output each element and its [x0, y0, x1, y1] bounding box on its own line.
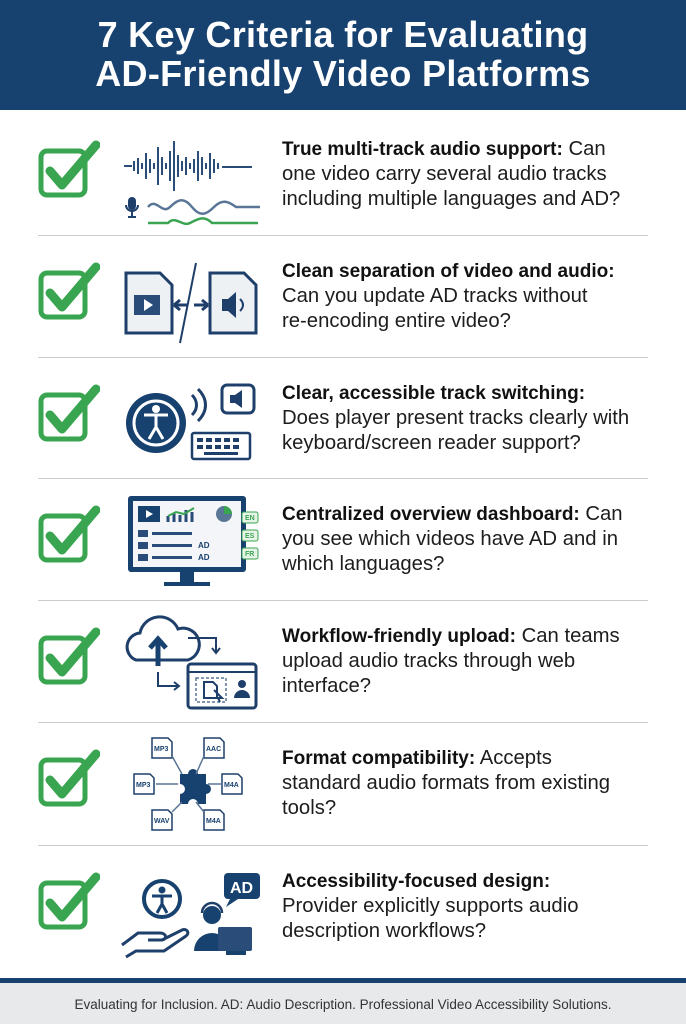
text [282, 383, 629, 454]
text: standard audio formats from existing [282, 772, 610, 794]
icon: checkbox [38, 140, 100, 198]
icon: cloud upload [126, 615, 258, 710]
icon: audio formats puzzle: AAC [206, 746, 221, 753]
text: keyboard/screen reader support? [282, 432, 581, 454]
icon: audio formats puzzle: MP3 [154, 746, 168, 753]
icon: dashboard monitor [128, 496, 258, 586]
text [282, 503, 623, 575]
icon: checkbox [38, 384, 100, 442]
text [282, 261, 615, 332]
icon: checkbox [38, 872, 100, 930]
text: Clean separation of video and audio: [282, 261, 615, 282]
text [282, 747, 610, 819]
footer [0, 978, 686, 1024]
icon: dashboard monitor: ES [245, 533, 255, 540]
text [282, 138, 620, 210]
icon: hand with accessibility and AD agent: AD [230, 880, 253, 897]
text: Can you update AD tracks without [282, 285, 588, 307]
text: Workflow-friendly upload: Can teams [282, 625, 620, 647]
icon: audio formats puzzle: M4A [206, 818, 221, 825]
icon: audio formats puzzle: MP3 [136, 782, 150, 789]
text: description workflows? [282, 920, 486, 942]
icon: audio waveform [124, 141, 260, 226]
icon: audio formats puzzle: M4A [224, 782, 239, 789]
icon: checkbox [38, 628, 100, 684]
icon: dashboard monitor: FR [245, 551, 254, 558]
icon: audio formats puzzle [133, 737, 243, 831]
title: 7 Key Criteria for Evaluating [98, 14, 588, 55]
text: Provider explicitly supports audio [282, 895, 578, 917]
row 1 [38, 138, 620, 226]
row 7 [38, 871, 578, 958]
icon: checkbox [38, 262, 100, 320]
text: tools? [282, 797, 336, 819]
icon: dashboard monitor: AD [198, 553, 210, 562]
row 5 [38, 615, 620, 710]
row 4 [38, 496, 623, 586]
text: re-encoding entire video? [282, 310, 511, 332]
icon: accessibility and keyboard [126, 384, 256, 460]
footer: Evaluating for Inclusion. AD: Audio Description. Professional Video Accessibility Solutions. [74, 997, 612, 1012]
text: including multiple languages and AD? [282, 188, 620, 210]
text: which languages? [282, 553, 444, 575]
icon: checkbox [38, 750, 100, 806]
icon: dashboard monitor: AD [198, 541, 210, 550]
text: Format compatibility: Accepts [282, 747, 552, 769]
text: upload audio tracks through web [282, 650, 575, 672]
text: one video carry several audio tracks [282, 163, 607, 185]
title [0, 0, 686, 110]
icon: hand with accessibility and AD agent [121, 873, 260, 958]
text [282, 871, 578, 942]
row 3 [38, 383, 629, 460]
icon: audio formats puzzle: WAV [154, 818, 170, 825]
text: Does player present tracks clearly with [282, 407, 629, 429]
icon: video and audio files [124, 262, 258, 344]
text: Accessibility-focused design: [282, 871, 550, 892]
row 6 [38, 737, 610, 831]
icon: checkbox [38, 506, 100, 562]
row 2 [38, 261, 615, 344]
text: Clear, accessible track switching: [282, 383, 585, 404]
icon: dashboard monitor: EN [245, 515, 255, 522]
text: you see which videos have AD and in [282, 528, 618, 550]
text: True multi-track audio support: Can [282, 138, 606, 160]
title: AD-Friendly Video Platforms [95, 53, 591, 94]
text: Centralized overview dashboard: Can [282, 503, 623, 525]
text [282, 625, 620, 697]
text: interface? [282, 675, 371, 697]
